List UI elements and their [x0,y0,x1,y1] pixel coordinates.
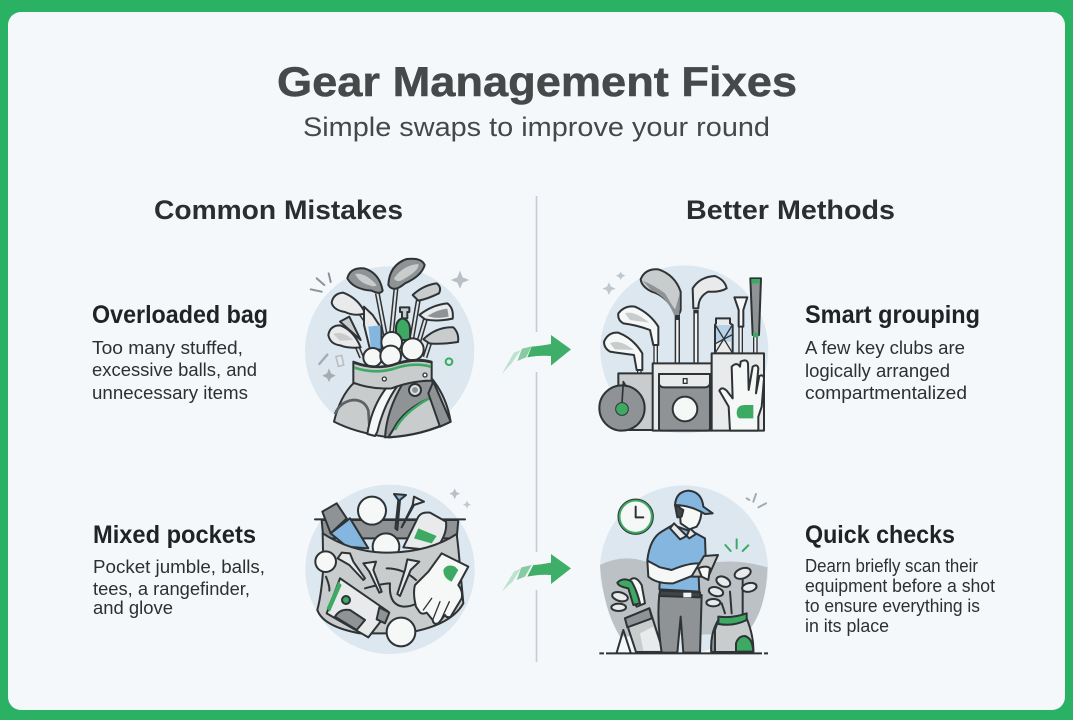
golfer legs [658,594,702,653]
icon: golfer doing a quick check [599,485,768,653]
left bag [617,630,631,653]
text block: smart grouping [805,301,980,403]
subtitle: Simple swaps to improve your round [303,112,770,142]
text block: overloaded bag: unnecessary items [92,382,248,403]
text block: smart grouping: A few key clubs are [805,337,965,358]
text block: overloaded bag: Too many stuffed, [92,337,243,358]
golfer torso [647,525,706,592]
icon: mixed pocket pouch [305,485,475,654]
balls [381,332,402,353]
ground [599,650,768,656]
text block: mixed pockets: tees, a rangefinder, [93,578,250,599]
heading: better methods: Better Methods [686,195,895,225]
right clubs [722,577,743,613]
tablet [691,555,718,577]
title: Gear Management Fixes [277,58,797,105]
text block: mixed pockets [93,521,265,618]
bag body [334,378,451,437]
text block: quick checks: Dearn briefly scan their [805,555,978,576]
text block: mixed pockets: Mixed pockets [93,521,256,549]
icon: overloaded golf bag [305,259,474,437]
head [679,505,702,529]
text block: quick checks [805,521,995,636]
text block: overloaded bag: excessive balls, and [92,359,257,380]
text block: mixed pockets: and glove [93,597,173,618]
clubs [377,293,386,337]
text block: mixed pockets: Pocket jumble, balls, [93,556,265,577]
right bag [711,618,753,652]
text block: smart grouping: logically arranged [805,360,950,381]
text block: quick checks: in its place [805,615,889,636]
arrow: overloaded bag to smart grouping [502,335,571,374]
text block: smart grouping: Smart grouping [805,301,980,329]
tube and bottle [364,307,381,349]
arrow: mixed pockets to quick checks [502,554,571,591]
text block: quick checks: Quick checks [805,521,955,549]
text block: smart grouping: compartmentalized [805,382,967,403]
text block: quick checks: equipment before a shot [805,575,995,596]
arm [647,561,703,583]
heading: common mistakes: Common Mistakes [154,195,403,225]
icon: organized clubs and compartments [599,265,768,433]
text block: overloaded bag [92,301,268,403]
text block: quick checks: to ensure everything is [805,595,980,616]
clock [619,500,652,533]
text block: overloaded bag: Overloaded bag [92,301,268,329]
